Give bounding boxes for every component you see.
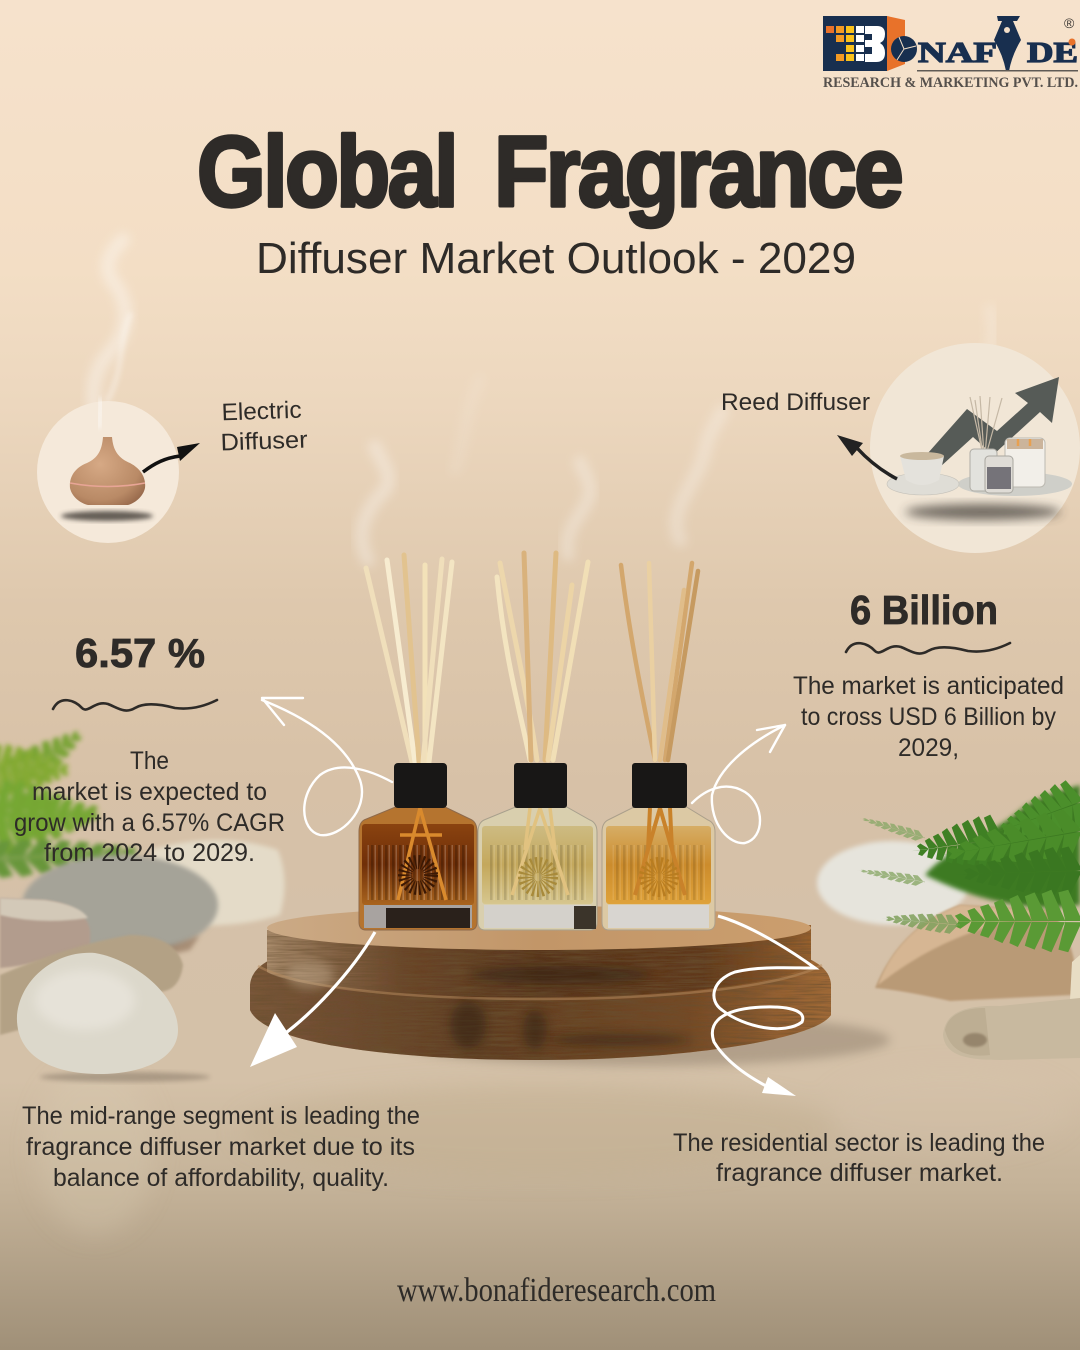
text: 6 billion description	[793, 672, 1064, 762]
left stones	[0, 840, 285, 1082]
text: residential sector: fragrance diffuser market.	[716, 1159, 1003, 1187]
arrow: electric diffuser	[143, 443, 200, 472]
label: electric diffuser: Electric	[221, 397, 302, 426]
label: electric diffuser: Diffuser	[220, 426, 308, 456]
title	[197, 116, 901, 228]
smoke wisps	[93, 240, 992, 560]
label: electric diffuser	[219, 396, 308, 456]
wood platform	[250, 906, 831, 1060]
subtitle: Diffuser Market Outlook - 2029	[256, 234, 856, 283]
text: residential sector	[673, 1129, 1045, 1187]
logo: ®	[1064, 15, 1075, 31]
logo: DE	[1027, 38, 1078, 69]
arrow: white swirl to 6 billion stat	[692, 725, 785, 843]
text: mid-range segment: balance of affordability, quality.	[53, 1164, 389, 1192]
text: 6 billion description: to cross USD 6 Billion by	[801, 703, 1056, 731]
logo	[823, 15, 1078, 91]
wood platform shadow	[390, 1014, 890, 1066]
left fern	[0, 712, 151, 879]
text: CAGR description: market is expected to	[32, 778, 267, 806]
text: CAGR description: grow with a 6.57% CAGR	[14, 809, 285, 837]
text: CAGR description: The	[130, 747, 169, 775]
text: residential sector: The residential sector is leading the	[673, 1129, 1045, 1157]
stat: 6 billion	[846, 587, 1010, 654]
label: reed diffuser: Reed Diffuser	[721, 389, 870, 416]
bottle 1: amber	[359, 763, 477, 930]
right stones and fern	[817, 776, 1080, 1060]
title: Fragrance	[494, 116, 901, 228]
text: mid-range segment: fragrance diffuser market due to its	[26, 1133, 415, 1161]
arrow: white swirl to residential text	[712, 916, 815, 1096]
text: mid-range segment	[22, 1102, 420, 1192]
text: CAGR description	[14, 747, 285, 867]
text: mid-range segment: The mid-range segment is leading the	[22, 1102, 420, 1130]
bottle 2: pale yellow	[478, 763, 597, 930]
stat: 6.57 percent: 6.57 %	[75, 630, 205, 676]
logo: NAF	[918, 38, 997, 69]
title: Global	[197, 116, 456, 228]
arrow: white swirl to CAGR stat	[262, 698, 392, 835]
arrow: white to mid-range text	[250, 932, 375, 1067]
bottle 3: golden	[602, 763, 715, 930]
stat: 6.57 percent	[53, 630, 217, 711]
arrow: reed diffuser	[837, 435, 897, 479]
electric diffuser circle	[37, 398, 179, 543]
reed diffuser circle	[870, 343, 1080, 553]
floor reflections	[35, 1065, 1070, 1235]
text: 6 billion description: 2029,	[898, 734, 959, 762]
website url: www.bonafideresearch.com	[397, 1272, 716, 1309]
reeds	[366, 553, 698, 762]
text: CAGR description: from 2024 to 2029.	[44, 839, 255, 867]
logo: RESEARCH & MARKETING PVT. LTD.	[823, 75, 1078, 91]
text: 6 billion description: The market is anticipated	[793, 672, 1064, 700]
stat: 6 billion: 6 Billion	[850, 587, 998, 633]
